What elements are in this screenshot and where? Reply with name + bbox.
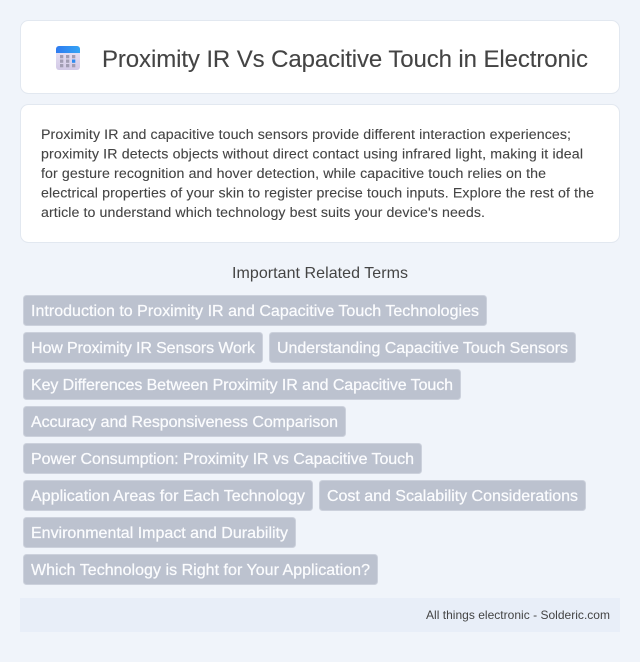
intro text panel: electrical properties of your skin to register precise touch inputs. Explore the rest of the bbox=[41, 186, 594, 202]
heading: related terms: Important Related Terms bbox=[232, 265, 408, 282]
intro text panel bbox=[20, 104, 620, 242]
tag: application areas: Application Areas for Each Technology bbox=[31, 488, 305, 505]
icon: calendar grid bbox=[56, 46, 80, 70]
tag: environmental impact bbox=[24, 518, 296, 548]
tag: cost and scalability: Cost and Scalability Considerations bbox=[327, 488, 578, 505]
tag: cost and scalability bbox=[320, 480, 586, 510]
tag: key differences: Key Differences Between Proximity IR and Capacitive Touch bbox=[31, 377, 453, 394]
intro text panel: Proximity IR and capacitive touch sensors provide different interaction experiences; bbox=[41, 127, 571, 143]
footer bar bbox=[20, 598, 620, 632]
intro text panel: proximity IR detects objects without direct contact using infrared light, making it ideal bbox=[41, 146, 583, 162]
tag: introduction: Introduction to Proximity IR and Capacitive Touch Technologies bbox=[31, 303, 479, 320]
header panel bbox=[20, 20, 620, 94]
tag: introduction bbox=[24, 296, 486, 326]
tag: which technology bbox=[24, 554, 378, 584]
intro text panel: for gesture recognition and hover detection, while capacitive touch relies on the bbox=[41, 166, 546, 182]
tag: application areas bbox=[24, 480, 312, 510]
intro text panel: article to understand which technology best suits your device's needs. bbox=[41, 205, 485, 221]
tag: power consumption: Power Consumption: Proximity IR vs Capacitive Touch bbox=[31, 451, 414, 468]
tag: power consumption bbox=[24, 444, 422, 474]
tag: key differences bbox=[24, 370, 460, 400]
tag: how sensors work: How Proximity IR Sensors Work bbox=[31, 340, 256, 357]
tag: capacitive sensors: Understanding Capacitive Touch Sensors bbox=[277, 340, 568, 357]
tag: accuracy: Accuracy and Responsiveness Comparison bbox=[31, 414, 338, 431]
tag: environmental impact: Environmental Impact and Durability bbox=[31, 525, 288, 542]
title: Proximity IR Vs Capacitive Touch in Electronic bbox=[102, 46, 588, 73]
tag: how sensors work bbox=[24, 332, 262, 362]
footer credit: All things electronic - Solderic.com bbox=[426, 608, 610, 622]
tag: accuracy bbox=[24, 406, 346, 436]
tag: capacitive sensors bbox=[270, 332, 576, 362]
tag: which technology: Which Technology is Right for Your Application? bbox=[31, 562, 370, 579]
